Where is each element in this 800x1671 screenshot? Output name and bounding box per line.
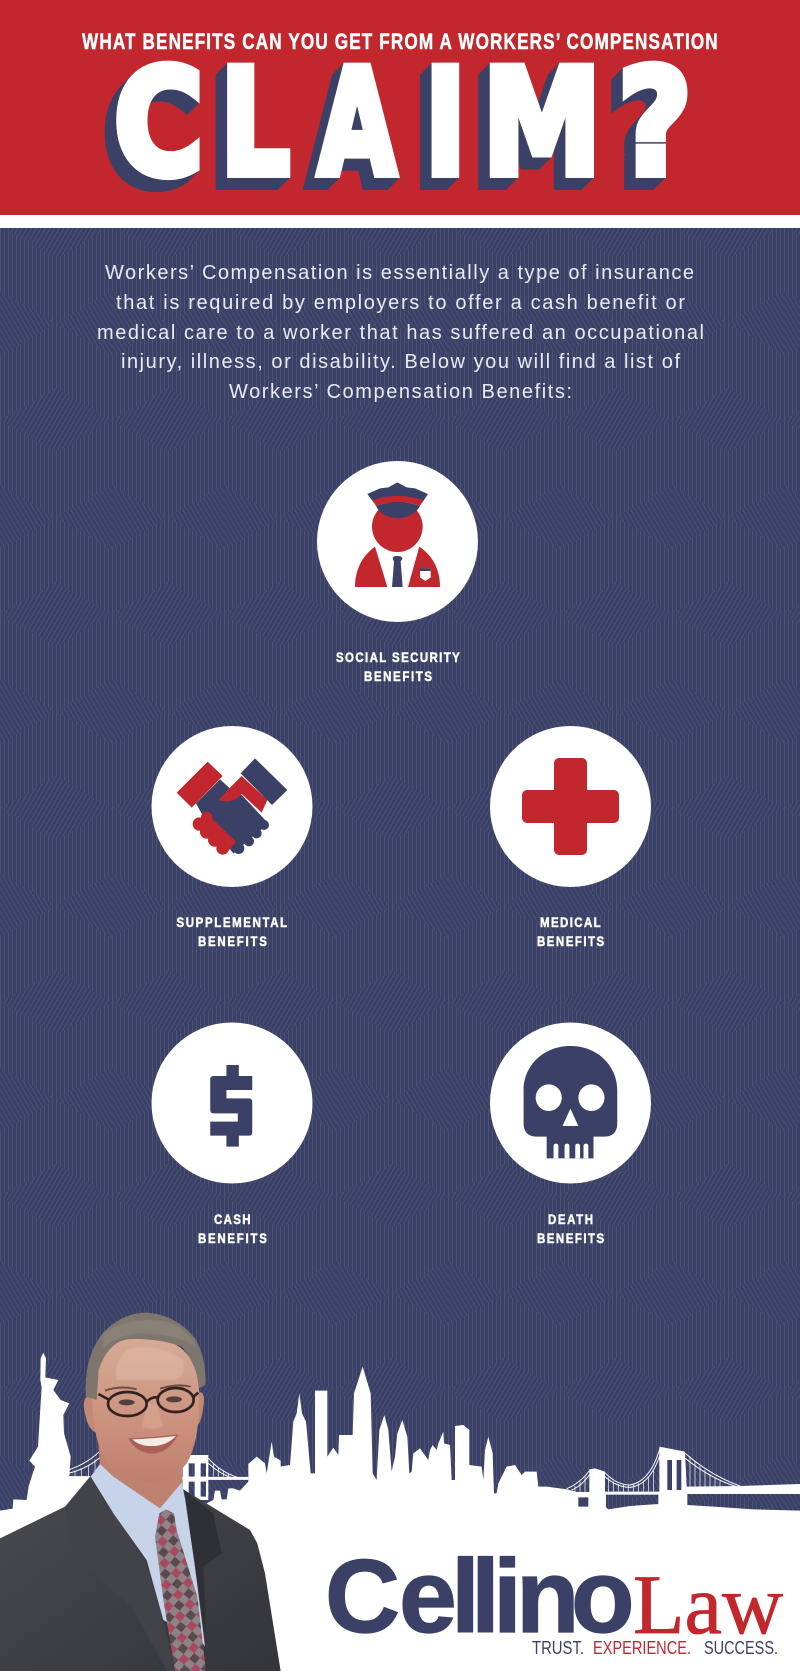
text block: introduction: medical care to a worker that has suffered an occupational [97, 322, 704, 344]
label: supplemental benefits: BENEFITS [198, 933, 267, 949]
label: social security benefits: SOCIAL SECURITY [336, 649, 460, 665]
tagline [532, 1638, 778, 1658]
label: cash benefits: CASH [214, 1211, 250, 1227]
heading: CLAIM?: C [114, 38, 204, 208]
heading: CLAIM?: M [482, 39, 601, 209]
text block: introduction: that is required by employers to offer a cash benefit or [116, 292, 685, 314]
tagline: TRUST. [532, 1638, 584, 1658]
logo word: Law: Law [633, 1558, 784, 1652]
label: medical benefits: BENEFITS [537, 933, 605, 949]
heading: CLAIM?: A [318, 38, 396, 208]
label: supplemental benefits [176, 914, 287, 949]
label: supplemental benefits: SUPPLEMENTAL [176, 914, 287, 930]
lapels [66, 1477, 175, 1671]
icon: medical cross [522, 758, 619, 855]
panel: social security benefits [317, 461, 478, 684]
glasses [98, 1388, 198, 1416]
icon: skull [524, 1046, 617, 1158]
icon circle: medical [490, 726, 651, 887]
icon: handshake [177, 758, 287, 855]
label: medical benefits: MEDICAL [540, 914, 601, 930]
tagline: SUCCESS. [704, 1638, 778, 1658]
neck [98, 1443, 183, 1510]
tagline: EXPERIENCE. [593, 1638, 691, 1658]
heading: CLAIM?: L [220, 39, 290, 209]
panel: red header band [0, 0, 800, 215]
heading: CLAIM?: ? [618, 39, 692, 209]
icon circle: cash [152, 1022, 312, 1184]
panel: cash benefits [152, 1022, 312, 1246]
shirt [91, 1464, 205, 1647]
panel: medical benefits [490, 726, 651, 949]
skyline: manhattan and brooklyn bridge [280, 1367, 800, 1671]
label: cash benefits [198, 1211, 267, 1246]
label: cash benefits: BENEFITS [198, 1230, 267, 1246]
heading: what benefits line: WHAT BENEFITS CAN YOU GET FROM A WORKERS’ COMPENSATION [82, 30, 718, 55]
label: death benefits: BENEFITS [537, 1230, 605, 1246]
panel: supplemental benefits [152, 726, 312, 949]
text block: introduction [97, 262, 704, 403]
icon: dollar sign [210, 1065, 252, 1147]
white divider band [0, 215, 800, 228]
label: social security benefits: BENEFITS [364, 668, 432, 684]
logo: Cellino Law [325, 1539, 784, 1658]
portrait: attorney [0, 1313, 281, 1671]
text block: introduction: Workers’ Compensation Benefits: [229, 381, 572, 403]
heading: CLAIM?: I [425, 38, 466, 208]
icon circle: supplemental [152, 726, 312, 887]
heading: CLAIM? [114, 38, 692, 209]
icon circle: social security [317, 461, 478, 622]
icon: officer [355, 482, 440, 587]
icon circle: death [490, 1022, 651, 1184]
panel: death benefits [490, 1022, 651, 1246]
label: death benefits [537, 1211, 605, 1246]
smile [128, 1434, 178, 1453]
skyline: statue of liberty and left bridge [0, 1353, 281, 1671]
logo word: Cellino: Cellino [325, 1539, 635, 1655]
label: medical benefits [537, 914, 605, 949]
label: death benefits: DEATH [548, 1211, 593, 1227]
suit [0, 1470, 281, 1671]
head [84, 1313, 205, 1482]
tie [155, 1509, 206, 1671]
label: social security benefits [336, 649, 460, 684]
text block: introduction: Workers’ Compensation is essentially a type of insurance [105, 262, 694, 284]
text block: introduction: injury, illness, or disability. Below you will find a list of [121, 351, 680, 373]
